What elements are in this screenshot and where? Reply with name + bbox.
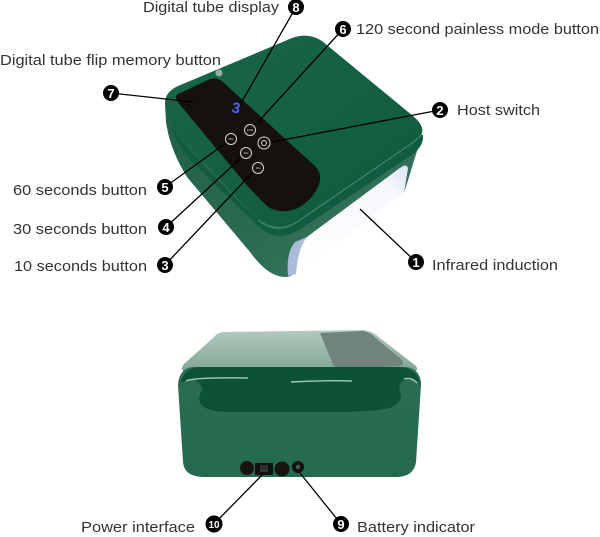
button: 60s xyxy=(226,134,236,144)
digital tube display: 3 xyxy=(230,99,242,118)
button: 10s xyxy=(252,162,264,174)
button: 120s xyxy=(244,124,256,136)
button: power xyxy=(258,137,270,149)
back lamp front face xyxy=(178,367,421,477)
power switch xyxy=(255,463,273,475)
label: power interface: Power interface xyxy=(81,519,195,536)
badge 3: 3 xyxy=(161,258,169,273)
button: 120s: 120s xyxy=(247,128,254,132)
badge 3 xyxy=(157,257,173,273)
back lamp port: knob xyxy=(240,461,254,475)
badge 8 xyxy=(288,0,304,15)
black control panel xyxy=(176,79,320,211)
sensor dot xyxy=(216,70,222,76)
badge 6: 6 xyxy=(339,22,347,37)
button: 30s: 30s xyxy=(244,151,249,155)
badge 2: 2 xyxy=(436,103,444,118)
leader lines xyxy=(111,7,440,524)
label: 120 second painless mode button: 120 second painless mode button xyxy=(356,21,599,38)
badge 9 xyxy=(333,516,349,532)
button: 60s: 60s xyxy=(229,137,234,141)
label: host switch: Host switch xyxy=(457,102,540,119)
badge 8: 8 xyxy=(292,0,300,15)
badge 10: 10 xyxy=(208,520,220,531)
label: digital tube flip memory button: Digital tube flip memory button xyxy=(0,52,221,69)
badge 5 xyxy=(157,179,173,195)
button: 10s: 10s xyxy=(256,166,261,170)
badge 1 xyxy=(408,254,424,270)
back lamp top face xyxy=(182,330,417,372)
lamp top face xyxy=(165,36,422,228)
badge 4 xyxy=(158,219,174,235)
back lamp glossy band xyxy=(180,367,420,412)
battery indicator socket xyxy=(292,461,304,473)
badge 7 xyxy=(103,85,119,101)
lamp: back view xyxy=(178,330,421,477)
badge 4: 4 xyxy=(162,220,170,235)
back lamp port: knob xyxy=(274,462,290,476)
label: 30 seconds button: 30 seconds button xyxy=(13,221,147,238)
badge 10 xyxy=(206,516,222,532)
label: infrared induction: Infrared induction xyxy=(432,257,558,274)
label: battery indicator: Battery indicator xyxy=(357,519,475,536)
badge 1: 1 xyxy=(412,255,420,270)
badge 6 xyxy=(335,21,351,37)
lamp: top view xyxy=(165,36,423,277)
label: 60 seconds button: 60 seconds button xyxy=(13,182,147,199)
badge 7: 7 xyxy=(107,86,115,101)
lamp opening xyxy=(296,166,408,274)
lamp body sides xyxy=(165,60,422,277)
button: 30s xyxy=(240,148,252,158)
badge 5: 5 xyxy=(161,180,169,195)
badge 9: 9 xyxy=(337,517,345,532)
lamp rim xyxy=(170,125,423,236)
badge 2 xyxy=(432,102,448,118)
label: 10 seconds button: 10 seconds button xyxy=(14,258,147,275)
